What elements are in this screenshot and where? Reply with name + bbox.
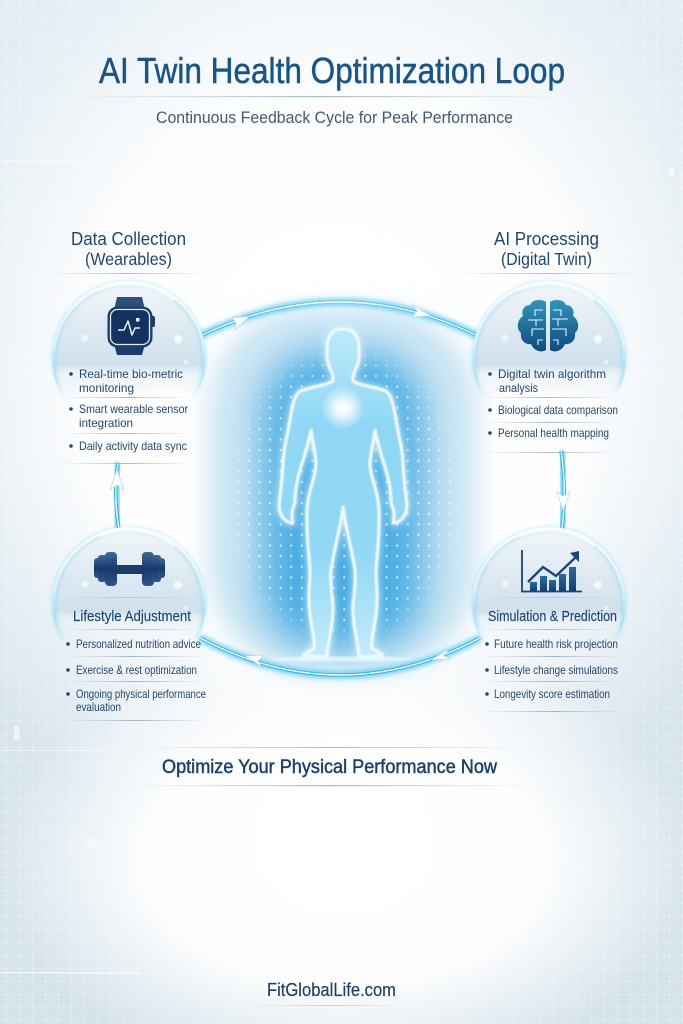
- arrow: right connector down to simulation: [557, 451, 570, 529]
- footer website: FitGlobalLife.com: [267, 980, 396, 1000]
- bullet list: simulation and prediction: Future health risk projection: [494, 637, 618, 651]
- bullet list: data collection: integration: [79, 416, 133, 430]
- heading: simulation and prediction: Simulation & Prediction: [488, 609, 617, 625]
- dome: data collection: [53, 282, 205, 434]
- bullet list: AI processing: Biological data comparison: [498, 403, 618, 417]
- bullet list: data collection: monitoring: [79, 381, 134, 395]
- arrow: top arc from wearables to AI processing: [198, 302, 480, 337]
- bullet list: AI processing: Personal health mapping: [498, 426, 609, 440]
- bullet list: data collection: [60, 367, 195, 464]
- dome: lifestyle adjustment: [53, 528, 205, 680]
- heading: data collection: Data Collection: [71, 228, 186, 249]
- bullet list: AI processing: analysis: [499, 381, 538, 395]
- icon: circuit brain: [518, 300, 578, 351]
- bullet list: lifestyle adjustment: Ongoing physical performance: [76, 687, 206, 701]
- icon: dumbbell: [94, 552, 165, 586]
- bullet list: data collection: Smart wearable sensor: [79, 402, 188, 416]
- bullet list: data collection: Daily activity data sync: [79, 439, 187, 453]
- icon: rising chart: [522, 550, 582, 592]
- bullet list: lifestyle adjustment: Personalized nutrition advice: [76, 637, 201, 651]
- heading: AI processing: [494, 228, 599, 269]
- bullet list: AI processing: Digital twin algorithm: [498, 367, 606, 381]
- subtitle: Continuous Feedback Cycle for Peak Performance: [156, 108, 513, 127]
- arrow: bottom arc from simulation to lifestyle: [200, 638, 480, 675]
- bullet list: AI processing: [480, 367, 620, 453]
- panel: data collection: [45, 228, 210, 464]
- floor glow: [268, 656, 418, 662]
- bullet list: lifestyle adjustment: Exercise & rest optimization: [76, 663, 197, 677]
- heading: lifestyle adjustment: Lifestyle Adjustment: [73, 609, 191, 625]
- title rule: [65, 96, 575, 97]
- heading: AI processing: (Digital Twin): [501, 249, 592, 269]
- bullet list: simulation and prediction: Longevity score estimation: [494, 687, 610, 701]
- heading: AI processing: AI Processing: [494, 228, 599, 249]
- panel: simulation and prediction: [473, 528, 628, 712]
- heading: data collection: [71, 228, 186, 269]
- dome: simulation and prediction: [473, 528, 625, 680]
- central glow with dot field: [208, 308, 478, 668]
- bullet list: lifestyle adjustment: evaluation: [76, 700, 121, 714]
- human figure: [279, 329, 407, 657]
- title: AI Twin Health Optimization Loop: [99, 50, 565, 91]
- call to action: Optimize Your Physical Performance Now: [162, 757, 497, 778]
- heading: data collection: (Wearables): [85, 249, 172, 269]
- bullet list: lifestyle adjustment: [60, 637, 210, 721]
- bullet list: data collection: Real-time bio-metric: [79, 367, 183, 381]
- panel: AI processing: [455, 228, 640, 453]
- panel: lifestyle adjustment: [53, 528, 210, 721]
- dome: AI processing: [473, 282, 625, 434]
- arrow: left connector up to wearables: [110, 463, 124, 529]
- bullet list: simulation and prediction: [478, 637, 628, 712]
- bullet list: simulation and prediction: Lifestyle change simulations: [494, 663, 618, 677]
- icon: smartwatch: [108, 297, 155, 355]
